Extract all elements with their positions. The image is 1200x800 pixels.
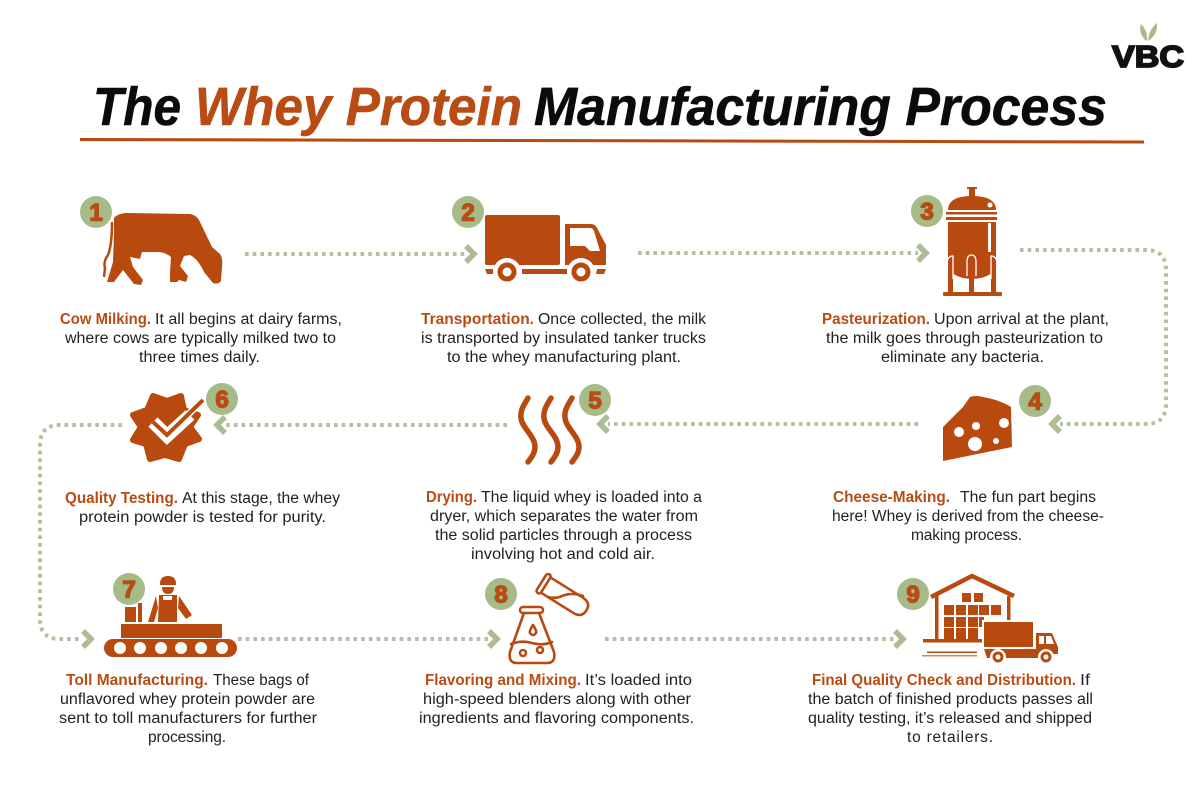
panel: step 3 pasteurization	[822, 187, 1109, 366]
text: cheese-making: making process.	[911, 527, 1022, 544]
badge: 1	[80, 196, 112, 228]
icon: flask and test tube	[510, 573, 592, 663]
text: toll manufacturing: unflavored whey protein powder are	[60, 691, 315, 708]
text: cheese-making: here! Whey is derived from the cheese-	[832, 508, 1104, 525]
badge: 4	[1019, 385, 1051, 417]
icon: cheese	[943, 396, 1012, 461]
badge: 3: 3	[920, 198, 934, 226]
text: cow milking: It all begins at dairy farms,	[155, 311, 342, 328]
text: drying: Drying.	[426, 489, 477, 506]
logo: VBC: VBC	[1112, 39, 1184, 74]
text: cow milking	[60, 311, 342, 366]
panel: step 9 final quality check and distribution	[808, 576, 1093, 746]
text: toll manufacturing: Toll Manufacturing.	[66, 672, 208, 689]
badge: 5	[579, 384, 611, 416]
badge: 2: 2	[461, 200, 475, 226]
badge: 8	[485, 578, 517, 610]
badge: 7: 7	[122, 576, 136, 604]
text: quality testing: Quality Testing.	[65, 490, 178, 507]
text: flavoring and mixing: ingredients and flavoring components.	[419, 710, 694, 727]
panel: step 1 cow milking	[60, 196, 342, 366]
text: flavoring and mixing	[419, 672, 694, 727]
logo: VBC	[1112, 23, 1184, 74]
text: final quality check and distribution: quality testing, it’s released and shipped	[808, 710, 1092, 727]
text: transportation: Once collected, the milk	[538, 311, 706, 328]
panel: step 2 transportation	[421, 196, 706, 366]
arrow: step 8 to 9	[605, 631, 903, 647]
icon: heat waves	[521, 398, 579, 462]
arrow: step 5 to 6	[217, 417, 507, 433]
badge: 1: 1	[89, 200, 103, 226]
text: flavoring and mixing: high-speed blenders along with other	[423, 691, 691, 708]
text: cheese-making: Cheese-Making.	[833, 489, 950, 506]
icon: pasteurization tank	[943, 187, 1002, 296]
text: pasteurization: the milk goes through pasteurization to	[826, 330, 1103, 347]
text: pasteurization: Pasteurization.	[822, 311, 930, 328]
icon: warehouse and truck	[922, 576, 1058, 665]
text: final quality check and distribution	[808, 672, 1093, 746]
icon: quality badge with check	[133, 396, 203, 459]
badge: 6	[206, 383, 238, 415]
text: drying: dryer, which separates the water from	[430, 508, 698, 525]
text: final quality check and distribution: the batch of finished products passes all	[808, 691, 1093, 708]
text: final quality check and distribution: Final Quality Check and Distribution.	[812, 672, 1076, 689]
text: cheese-making	[832, 489, 1104, 544]
title: Manufacturing Process	[534, 77, 1107, 137]
panel: step 4 cheese-making	[832, 385, 1104, 544]
text: quality testing: At this stage, the whey	[182, 490, 340, 507]
arrow: step 1 to 2	[245, 246, 474, 262]
title underline	[80, 140, 1144, 142]
title: The	[93, 77, 181, 137]
text: drying: involving hot and cold air.	[471, 546, 655, 563]
text: drying: The liquid whey is loaded into a	[481, 489, 702, 506]
text: pasteurization: eliminate any bacteria.	[881, 349, 1044, 366]
text: cheese-making: The fun part begins	[960, 489, 1096, 506]
title: Whey Protein	[195, 77, 522, 137]
badge: 9	[897, 578, 929, 610]
text: toll manufacturing: These bags of	[213, 672, 310, 689]
text: flavoring and mixing: It’s loaded into	[585, 672, 692, 689]
badge: 3	[911, 195, 943, 227]
arrow: step 3 to 4	[1020, 250, 1166, 432]
text: cow milking: Cow Milking.	[60, 311, 151, 328]
panel: step 5 drying	[426, 384, 702, 563]
text: final quality check and distribution: If	[1080, 672, 1091, 689]
badge: 7	[113, 573, 145, 605]
badge: 5: 5	[588, 388, 602, 414]
text: cow milking: where cows are typically milked two to	[64, 330, 336, 347]
icon: truck	[485, 215, 606, 286]
text: quality testing	[65, 490, 340, 526]
arrow: step 2 to 3	[638, 245, 926, 261]
text: transportation: Transportation.	[421, 311, 534, 328]
text: pasteurization	[822, 311, 1109, 366]
arrow: step 7 to 8	[238, 631, 497, 647]
badge: 8: 8	[494, 582, 508, 608]
badge: 4: 4	[1028, 388, 1042, 416]
badge: 2	[452, 196, 484, 228]
text: drying: the solid particles through a process	[435, 527, 692, 544]
panel: step 7 toll manufacturing	[59, 573, 317, 746]
panel: step 6 quality testing	[65, 383, 340, 526]
text: toll manufacturing: processing.	[148, 729, 226, 746]
badge: 6: 6	[215, 386, 229, 414]
text: toll manufacturing: sent to toll manufacturers for further	[59, 710, 317, 727]
text: flavoring and mixing: Flavoring and Mixing.	[425, 672, 581, 689]
badge: 9: 9	[906, 582, 920, 608]
text: toll manufacturing	[59, 672, 317, 746]
text: quality testing: protein powder is tested for purity.	[79, 509, 326, 526]
text: final quality check and distribution: to retailers.	[907, 729, 993, 746]
title	[93, 77, 1107, 137]
text: transportation: to the whey manufacturing plant.	[447, 349, 681, 366]
text: cow milking: three times daily.	[139, 349, 260, 366]
icon: cow	[104, 213, 222, 285]
text: pasteurization: Upon arrival at the plant,	[934, 311, 1109, 328]
arrow: step 6 to 7	[40, 425, 122, 647]
arrow: step 4 to 5	[600, 416, 918, 432]
panel: step 8 flavoring and mixing	[419, 573, 694, 727]
text: transportation: is transported by insulated tanker trucks	[421, 330, 706, 347]
text: drying	[426, 489, 702, 563]
text: transportation	[421, 311, 706, 366]
icon: conveyor worker	[104, 576, 237, 657]
